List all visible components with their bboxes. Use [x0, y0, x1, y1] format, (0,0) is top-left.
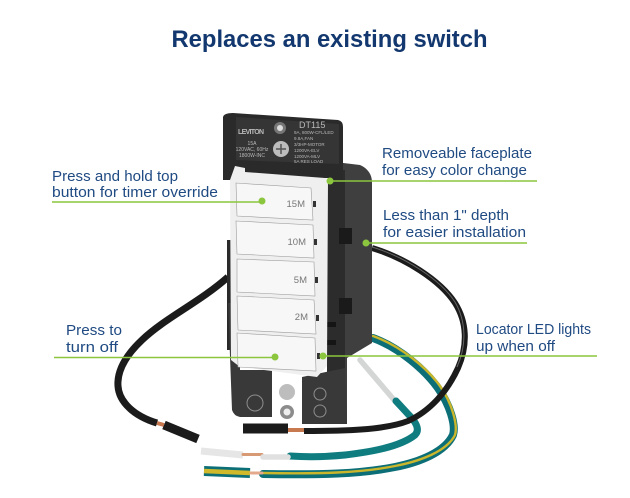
timer buttons [236, 183, 316, 371]
callout: depth: Less than 1" depth [383, 208, 509, 224]
yoke printed markings [236, 120, 334, 164]
title: Replaces an existing switch [172, 26, 488, 53]
callout: press to turn off [54, 323, 278, 360]
mounting yoke: top [223, 113, 343, 180]
button: 5M [237, 259, 315, 296]
callout: press to turn off: Press to [66, 323, 122, 339]
yoke printed markings: DT115 [299, 120, 325, 130]
yoke printed markings: 5A RES LOAD [294, 159, 324, 164]
side housing [327, 162, 372, 424]
button: 10M [236, 221, 314, 258]
wire: white and teal ground leads [201, 336, 456, 474]
callout: locator LED: up when off [476, 339, 556, 355]
mounting screws [273, 122, 295, 419]
callout: timer override [52, 169, 266, 204]
yoke printed markings: LEVITON [238, 129, 264, 136]
mounting yoke: bottom [228, 303, 272, 417]
button labels: 10M [288, 237, 306, 248]
button: 2M [237, 296, 316, 334]
callout: removeable faceplate: for easy color change [382, 163, 527, 179]
wire: black leads [118, 247, 465, 439]
callout: locator LED: Locator LED lights [476, 322, 591, 338]
yoke printed markings: 1800W-INC [239, 153, 265, 159]
product photo: timer switch with wires [118, 113, 465, 474]
button labels [287, 199, 308, 323]
yoke printed markings: 9.8A,FAN [294, 136, 313, 141]
callout: removeable faceplate: Removeable faceplate [382, 146, 532, 162]
LED indicators [313, 201, 320, 359]
faceplate [230, 166, 328, 377]
yoke printed markings: 15A [248, 141, 257, 147]
callout: removeable faceplate [326, 146, 537, 184]
yoke printed markings: 3/3HP-MOTOR [294, 142, 325, 147]
yoke printed markings: 120VAC, 60Hz [236, 147, 269, 153]
mounting yoke: side strips [227, 240, 235, 350]
button labels: 5M [294, 275, 307, 286]
callout: depth: for easier installation [383, 225, 526, 241]
callout: press to turn off: turn off [66, 340, 119, 356]
button: 15M [236, 183, 313, 220]
callout: locator LED [320, 322, 597, 360]
yoke printed markings: 1200VA-MLV [294, 154, 320, 159]
callout: depth [362, 208, 527, 246]
yoke printed markings: 9A, 800W-CFL/LED [294, 130, 334, 135]
button labels: 2M [295, 312, 308, 323]
yoke printed markings: 1200VA-ELV [294, 148, 319, 153]
callout: timer override: Press and hold top [52, 169, 178, 185]
callout: timer override: button for timer override [52, 185, 218, 201]
button: off [237, 333, 316, 371]
button labels: 15M [287, 199, 305, 210]
yoke certification marks [247, 388, 326, 417]
